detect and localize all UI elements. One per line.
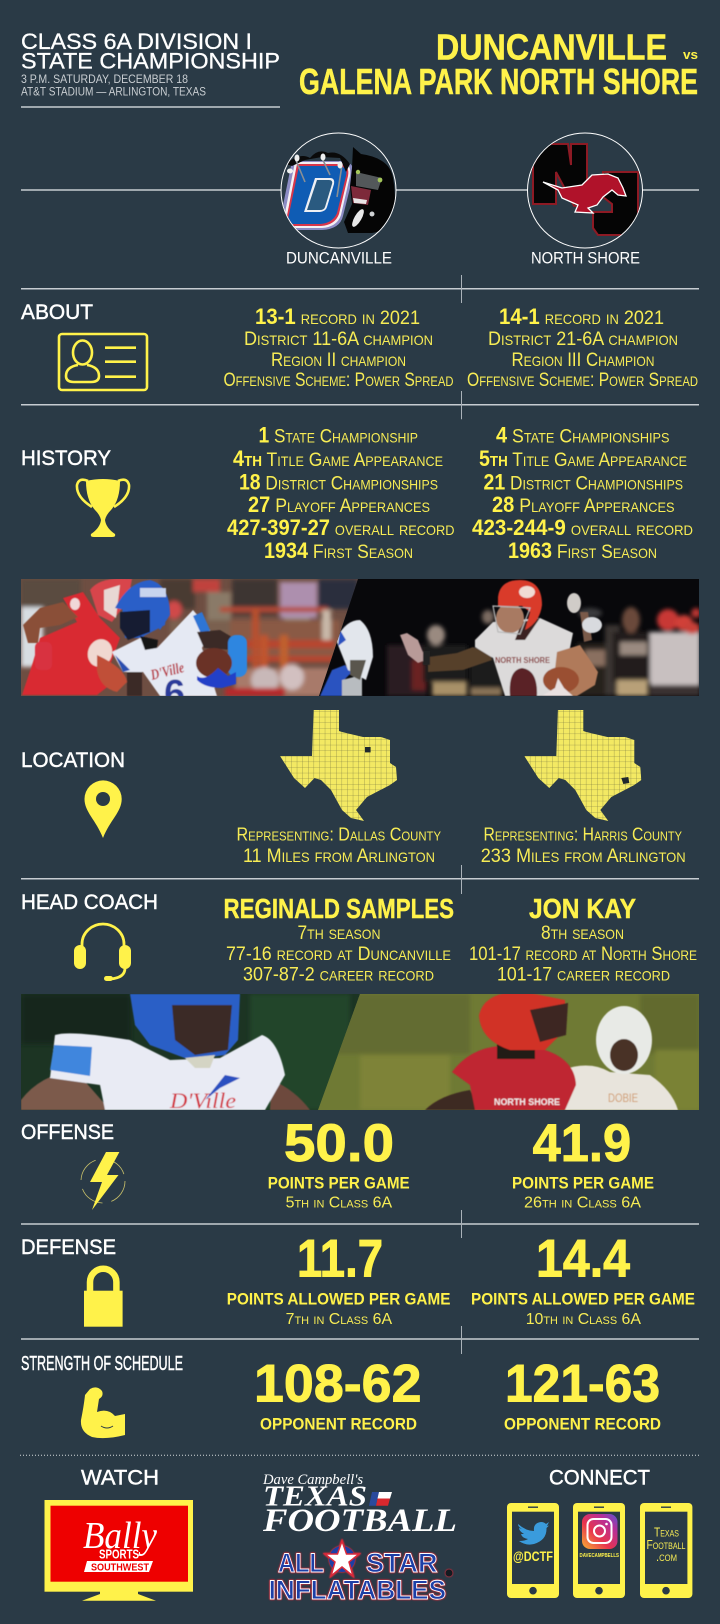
offense stats: Duncanville: 50.0 [284, 1114, 394, 1173]
logo: All Star Inflatables: ALL [278, 1548, 324, 1578]
team logo: North Shore [528, 133, 642, 248]
coach: North Shore: 101-17 career record [497, 964, 670, 986]
history: North Shore facts: 4 State Championships [496, 423, 670, 448]
offense stats: Duncanville: POINTS PER GAME [268, 1174, 410, 1193]
defense stats: North Shore: 14.4 [536, 1230, 630, 1289]
location text: Duncanville [236, 824, 441, 867]
schedule stats: North Shore: OPPONENT RECORD [504, 1415, 661, 1434]
heading: connect: CONNECT [549, 1467, 650, 1490]
schedule stats: North Shore: 121-63 [505, 1355, 660, 1414]
about: Duncanville facts: Offensive Scheme: Power Spread [224, 369, 454, 391]
team label: North Shore: NORTH SHORE [531, 250, 640, 268]
TV with Bally Sports Southwest logo: Bally [83, 1515, 157, 1557]
header: game info: CLASS 6A DIVISION I [21, 29, 252, 54]
defense stats: North Shore: POINTS ALLOWED PER GAME [471, 1290, 695, 1309]
team logo: Duncanville [278, 133, 396, 248]
history: North Shore facts [472, 423, 693, 563]
phone: Twitter: @DCTF [513, 1548, 553, 1564]
location text: Duncanville: Representing: Dallas County [236, 824, 441, 845]
photo banner: linemen and receivers: DOBIE [608, 1091, 638, 1105]
defense stats: North Shore [471, 1230, 695, 1328]
phone: Instagram: DAVECAMPBELLS [580, 1553, 619, 1559]
section heading: offense: OFFENSE [21, 1121, 114, 1144]
about: Duncanville facts: District 11-6A champion [244, 328, 433, 350]
section heading: defense: DEFENSE [21, 1236, 116, 1259]
offense stats: Duncanville [268, 1114, 410, 1212]
photo banner: players running with the ball [21, 579, 699, 696]
icon: headset [74, 924, 131, 981]
header: matchup title [299, 26, 698, 102]
header: game info: AT&T STADIUM — ARLINGTON, TEXAS [21, 86, 206, 98]
offense stats: North Shore [512, 1114, 654, 1212]
location text: North Shore: 233 Miles from Arlington [481, 845, 686, 867]
coach: Duncanville: REGINALD SAMPLES [224, 893, 454, 924]
history: Duncanville facts: 4th Title Game Appearance [233, 446, 443, 471]
logo: Dave Campbell's Texas Football: TEXAS [263, 1481, 367, 1513]
photo banner: linemen and receivers: D'Ville [169, 1088, 236, 1113]
icon: ID card [59, 334, 147, 390]
coach: North Shore [469, 893, 697, 986]
header: matchup title: DUNCANVILLE [436, 26, 667, 68]
about: Duncanville facts: 13-1 record in 2021 [255, 304, 420, 329]
icon: padlock [84, 1269, 123, 1327]
location text: North Shore [481, 824, 686, 867]
offense stats: Duncanville: 5th in Class 6A [286, 1195, 392, 1212]
history: North Shore facts: 423-244-9 overall record [472, 515, 693, 540]
map: Texas with Harris County [522, 708, 644, 823]
about: Duncanville facts: Region II champion [271, 349, 406, 371]
history: North Shore facts: 5th Title Game Appearance [479, 446, 687, 471]
about: North Shore facts: Region III Champion [512, 349, 654, 371]
coach: Duncanville: 307-87-2 career record [243, 964, 434, 986]
section heading: location: LOCATION [21, 749, 125, 772]
section heading: head coach: HEAD COACH [21, 891, 158, 914]
photo banner: players running with the ball: 6 [164, 673, 185, 715]
coach: Duncanville: 7th season [298, 922, 380, 944]
defense stats: Duncanville: POINTS ALLOWED PER GAME [227, 1290, 450, 1309]
logo: All Star Inflatables [269, 1541, 452, 1605]
logo: Dave Campbell's Texas Football: FOOTBALL [262, 1503, 457, 1539]
phone: website: Texas [654, 1525, 679, 1540]
icon: flexed arm [81, 1387, 125, 1438]
offense stats: North Shore: 26th in Class 6A [524, 1195, 641, 1212]
defense stats: North Shore: 10th in Class 6A [526, 1311, 641, 1328]
location text: Duncanville: 11 Miles from Arlington [243, 845, 435, 867]
about: North Shore facts: District 21-6A champion [488, 328, 678, 350]
icon: lightning bolt [81, 1152, 125, 1210]
about: Duncanville facts [224, 304, 454, 391]
phone: website: Football [646, 1537, 686, 1552]
icon: trophy [77, 479, 129, 537]
phone: website [640, 1503, 692, 1598]
schedule stats: Duncanville: 108-62 [254, 1355, 422, 1414]
history: Duncanville facts: 27 Playoff Apperances [248, 492, 430, 517]
TV with Bally Sports Southwest logo [44, 1500, 193, 1601]
history: North Shore facts: 1963 First Season [508, 538, 657, 563]
history: North Shore facts: 21 District Championships [484, 469, 683, 494]
section heading: about: ABOUT [21, 301, 93, 324]
schedule stats: Duncanville: OPPONENT RECORD [260, 1415, 417, 1434]
history: Duncanville facts: 1 State Championship [258, 423, 418, 448]
team label: Duncanville: DUNCANVILLE [286, 250, 392, 268]
heading: watch: WATCH [81, 1467, 159, 1490]
defense stats: Duncanville: 7th in Class 6A [286, 1311, 392, 1328]
location text: North Shore: Representing: Harris County [484, 824, 682, 845]
header: game info: 3 P.M. SATURDAY, DECEMBER 18 [21, 74, 188, 86]
history: Duncanville facts [227, 423, 454, 563]
offense stats: North Shore: 41.9 [533, 1114, 631, 1173]
header: game info [21, 29, 280, 98]
TV with Bally Sports Southwest logo: SOUTHWEST [91, 1562, 149, 1574]
logo: All Star Inflatables: INFLATABLES [269, 1575, 446, 1605]
coach: Duncanville [224, 893, 454, 986]
defense stats: Duncanville [227, 1230, 450, 1328]
phone: website: .com [656, 1549, 677, 1564]
section heading: history: HISTORY [21, 447, 111, 470]
about: North Shore facts: 14-1 record in 2021 [499, 304, 664, 329]
map: Texas with Dallas County [278, 708, 400, 823]
photo banner: players running with the ball: D'Ville [148, 660, 186, 684]
history: Duncanville facts: 18 District Championships [239, 469, 438, 494]
icon: map pin [84, 780, 122, 838]
photo banner: linemen and receivers: NORTH SHORE [494, 1097, 560, 1108]
logo: Dave Campbell's Texas Football [262, 1472, 457, 1539]
photo banner: players running with the ball: NORTH SHORE [495, 655, 550, 665]
header: game info: STATE CHAMPIONSHIP [21, 48, 280, 74]
coach: Duncanville: 77-16 record at Duncanville [226, 943, 451, 965]
history: Duncanville facts: 1934 First Season [264, 538, 413, 563]
phone: Twitter [507, 1503, 559, 1598]
TV with Bally Sports Southwest logo: SPORTS [99, 1548, 139, 1562]
logo: All Star Inflatables: STAR [366, 1548, 438, 1578]
history: Duncanville facts: 427-397-27 overall record [227, 515, 454, 540]
about: North Shore facts [467, 304, 698, 391]
defense stats: Duncanville: 11.7 [297, 1230, 383, 1289]
offense stats: North Shore: POINTS PER GAME [512, 1174, 654, 1193]
section heading: strength of schedule: STRENGTH OF SCHEDULE [21, 1353, 183, 1375]
phone: Instagram [573, 1503, 625, 1598]
coach: North Shore: 8th season [541, 922, 624, 944]
history: North Shore facts: 28 Playoff Apperances [492, 492, 674, 517]
logo: Dave Campbell's Texas Football: Dave Campbell's [262, 1472, 363, 1488]
header: matchup title: vs [683, 47, 698, 62]
photo banner: linemen and receivers [21, 992, 700, 1113]
coach: North Shore: JON KAY [529, 893, 636, 924]
